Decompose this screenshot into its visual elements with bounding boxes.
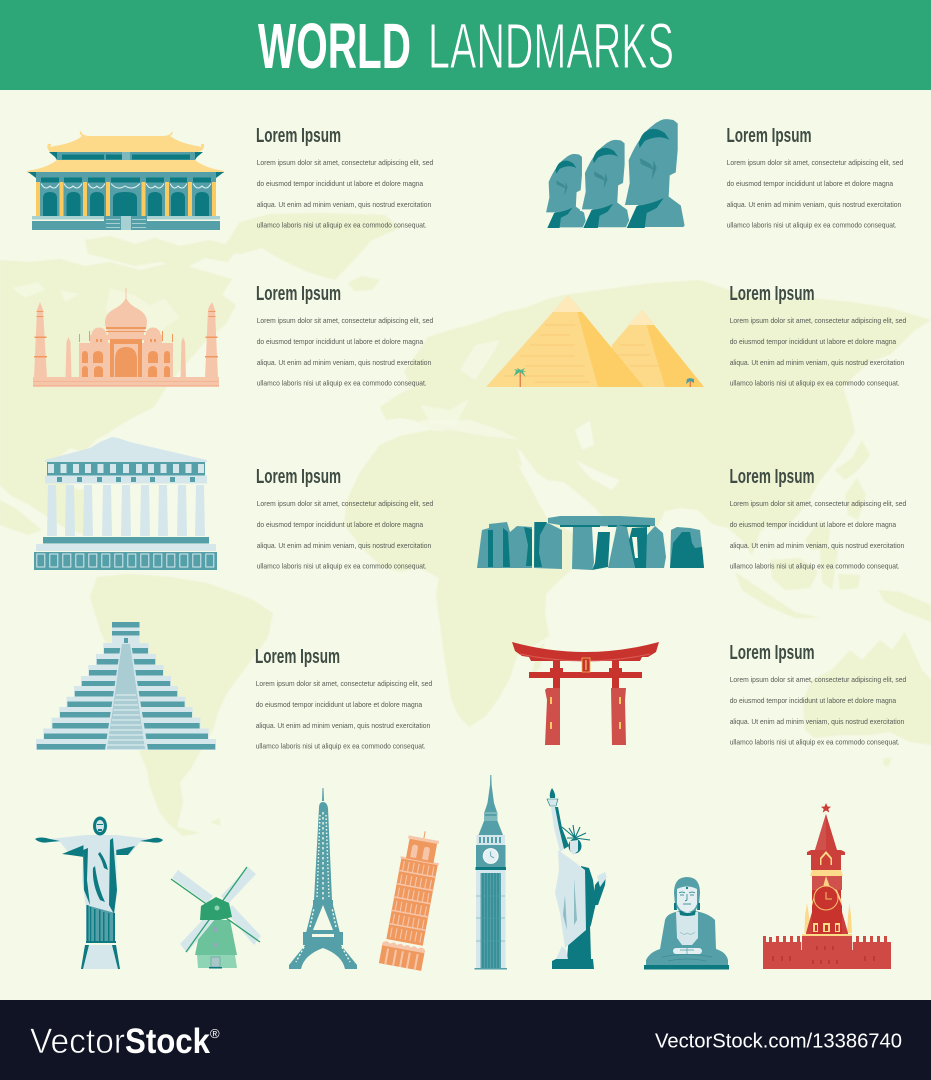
text block 1 <box>256 125 433 230</box>
icon: moai heads <box>545 118 686 228</box>
icon: pyramids <box>486 295 704 387</box>
text block 3: ullamco laboris nisi ut aliquip ex ea commodo consequat. <box>257 378 427 388</box>
text block 2 <box>726 125 903 230</box>
icon: christ the redeemer <box>35 816 163 969</box>
text block 6: ullamco laboris nisi ut aliquip ex ea commodo consequat. <box>730 562 900 570</box>
text block 5: aliqua. Ut enim ad minim veniam, quis nostrud exercitation <box>257 541 431 550</box>
icon: stonehenge <box>477 516 704 570</box>
moai large <box>624 118 686 228</box>
text block 8: ullamco laboris nisi ut aliquip ex ea commodo consequat. <box>730 738 900 746</box>
icon: parthenon <box>34 437 217 570</box>
text block 4: ullamco laboris nisi ut aliquip ex ea commodo consequat. <box>730 378 900 388</box>
text block 1: do eiusmod tempor incididunt ut labore et dolore magna <box>257 179 424 188</box>
text block 6 <box>730 466 906 570</box>
icon: spasskaya tower and kremlin wall <box>763 803 891 969</box>
palm tree 1 <box>514 368 527 387</box>
icon: big ben <box>474 775 507 970</box>
map inland seas <box>12 282 620 518</box>
footer url: VectorStock.com/13386740 <box>655 1030 902 1052</box>
icon: torii gate <box>512 642 659 745</box>
icon: mayan pyramid <box>36 622 216 750</box>
world map background <box>0 213 931 836</box>
text block 5: do eiusmod tempor incididunt ut labore et dolore magna <box>257 520 424 529</box>
text block 8: Lorem Ipsum <box>730 642 814 664</box>
text block 6: Lorem Ipsum <box>730 466 814 488</box>
text block 3 <box>256 283 433 388</box>
text block 2: Lorem Ipsum <box>726 125 812 147</box>
text block 2: ullamco laboris nisi ut aliquip ex ea commodo consequat. <box>727 220 897 230</box>
footer logo: Vector <box>30 1022 125 1061</box>
header band <box>0 0 931 90</box>
footer logo: Stock <box>125 1022 210 1061</box>
title <box>258 10 674 82</box>
text block 2: do eiusmod tempor incididunt ut labore et dolore magna <box>727 179 894 188</box>
icon: statue of liberty <box>547 788 607 969</box>
text block 4: Lorem ipsum dolor sit amet, consectetur adipiscing elit, sed <box>730 316 906 325</box>
text block 5: Lorem ipsum dolor sit amet, consectetur adipiscing elit, sed <box>257 499 433 508</box>
icon: leaning tower of pisa <box>379 827 446 971</box>
icon: eiffel tower <box>289 788 357 969</box>
text block 2: Lorem ipsum dolor sit amet, consectetur adipiscing elit, sed <box>727 158 903 167</box>
text block 3: do eiusmod tempor incididunt ut labore et dolore magna <box>257 337 424 346</box>
text block 7: Lorem ipsum dolor sit amet, consectetur adipiscing elit, sed <box>256 679 432 688</box>
moai medium <box>581 139 631 228</box>
text block 8 <box>730 642 906 746</box>
text block 4 <box>730 283 906 388</box>
text block 5 <box>256 466 433 570</box>
text block 4: Lorem Ipsum <box>730 283 814 305</box>
text block 8: do eiusmod tempor incididunt ut labore et dolore magna <box>730 696 897 705</box>
text block 1: Lorem ipsum dolor sit amet, consectetur adipiscing elit, sed <box>257 158 433 167</box>
text block 1: aliqua. Ut enim ad minim veniam, quis nostrud exercitation <box>257 200 431 209</box>
footer logo <box>30 1022 220 1061</box>
text block 6: aliqua. Ut enim ad minim veniam, quis nostrud exercitation <box>730 541 904 550</box>
text block 3: aliqua. Ut enim ad minim veniam, quis nostrud exercitation <box>257 358 431 367</box>
icon: windmill <box>171 867 261 968</box>
title: WORLD <box>258 10 411 82</box>
footer logo: ® <box>210 1026 220 1041</box>
text block 6: Lorem ipsum dolor sit amet, consectetur adipiscing elit, sed <box>730 499 906 508</box>
text block 7: ullamco laboris nisi ut aliquip ex ea commodo consequat. <box>256 742 426 750</box>
text block 4: aliqua. Ut enim ad minim veniam, quis nostrud exercitation <box>730 358 904 367</box>
icon: chinese palace <box>27 131 224 230</box>
text block 3: Lorem ipsum dolor sit amet, consectetur adipiscing elit, sed <box>257 316 433 325</box>
moai small <box>545 153 587 228</box>
icon: great buddha <box>644 877 729 970</box>
text block 5: Lorem Ipsum <box>256 466 341 488</box>
text block 5: ullamco laboris nisi ut aliquip ex ea commodo consequat. <box>257 562 427 570</box>
text block 6: do eiusmod tempor incididunt ut labore et dolore magna <box>730 520 897 529</box>
text block 3: Lorem Ipsum <box>256 283 341 305</box>
text block 2: aliqua. Ut enim ad minim veniam, quis nostrud exercitation <box>727 200 901 209</box>
text block 8: Lorem ipsum dolor sit amet, consectetur adipiscing elit, sed <box>730 675 906 684</box>
text block 8: aliqua. Ut enim ad minim veniam, quis nostrud exercitation <box>730 717 904 726</box>
text block 1: Lorem Ipsum <box>256 125 341 147</box>
text block 4: do eiusmod tempor incididunt ut labore et dolore magna <box>730 337 897 346</box>
text block 7: do eiusmod tempor incididunt ut labore et dolore magna <box>256 700 423 709</box>
text block 7 <box>255 646 432 750</box>
title: LANDMARKS <box>428 10 674 82</box>
footer band <box>0 1000 931 1080</box>
text block 1: ullamco laboris nisi ut aliquip ex ea commodo consequat. <box>257 220 427 230</box>
text block 7: aliqua. Ut enim ad minim veniam, quis nostrud exercitation <box>256 721 430 730</box>
palm tree 2 <box>686 378 694 387</box>
icon: taj mahal <box>33 288 219 387</box>
text block 7: Lorem Ipsum <box>255 646 340 668</box>
